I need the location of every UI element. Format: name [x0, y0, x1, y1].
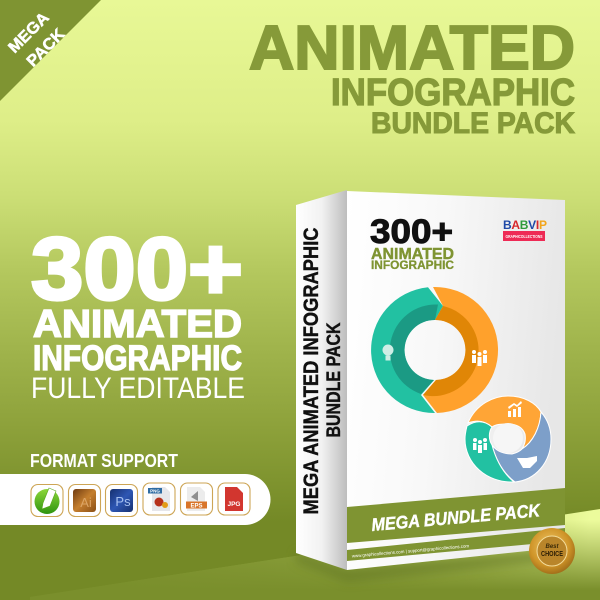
icon: illustrator [68, 484, 100, 516]
large circular chart [371, 287, 498, 413]
icon: coreldraw [31, 484, 63, 516]
corner ribbon: mega pack: MEGA [5, 9, 53, 57]
box front panel [347, 191, 565, 570]
icon: jpg [218, 483, 250, 515]
swirl centre hole [493, 423, 523, 453]
contact strip: www.graphicollections.com | support@graphicollections.com [352, 543, 470, 558]
box heading: 300+ [370, 213, 453, 251]
box side panel [296, 190, 347, 570]
box heading [370, 213, 454, 272]
icon: eps: EPS [190, 504, 203, 510]
icon: light bulb [382, 344, 394, 360]
corner ribbon: mega pack [0, 0, 101, 101]
corner ribbon: mega pack: PACK [24, 25, 69, 70]
contact strip [347, 528, 565, 561]
product box [296, 190, 565, 570]
title: INFOGRAPHIC [331, 72, 575, 114]
brand logo: GRAPHICOLLECTIONS [506, 234, 542, 239]
left headline: INFOGRAPHIC [33, 339, 242, 378]
box heading: ANIMATED [371, 246, 454, 263]
best choice badge: Best [545, 544, 559, 550]
icon: png: PNG [150, 488, 160, 494]
green band [347, 488, 565, 543]
icon: jpg: JPG [227, 501, 241, 508]
left headline: ANIMATED [33, 303, 242, 346]
icon: team [473, 438, 487, 453]
left headline [31, 219, 245, 405]
title [249, 14, 575, 140]
icon: photoshop [106, 484, 138, 516]
brand logo [503, 218, 547, 241]
band title: MEGA BUNDLE PACK [371, 500, 542, 535]
best choice badge [529, 528, 575, 574]
format support label: FORMAT SUPPORT [30, 451, 178, 471]
icon: png [143, 483, 175, 515]
icon: bar growth [508, 401, 522, 417]
title: ANIMATED [249, 14, 575, 83]
icon: people [472, 350, 487, 366]
icon: illustrator: Ai [80, 495, 92, 510]
icon: eps [180, 483, 212, 515]
brand logo: BABVIP [503, 218, 547, 232]
icon: photoshop: Ps [115, 494, 131, 509]
small swirl chart [465, 396, 551, 482]
best choice badge: CHOICE [541, 549, 563, 558]
icon: handshake [517, 456, 537, 468]
title: BUNDLE PACK [371, 107, 575, 140]
format support bar [0, 474, 270, 525]
left headline: 300+ [31, 219, 243, 318]
box side panel: BUNDLE PACK [324, 322, 345, 438]
left headline: FULLY EDITABLE [31, 372, 245, 405]
box heading: INFOGRAPHIC [371, 258, 454, 272]
box side panel: MEGA ANIMATED INFOGRAPHIC [300, 228, 323, 514]
